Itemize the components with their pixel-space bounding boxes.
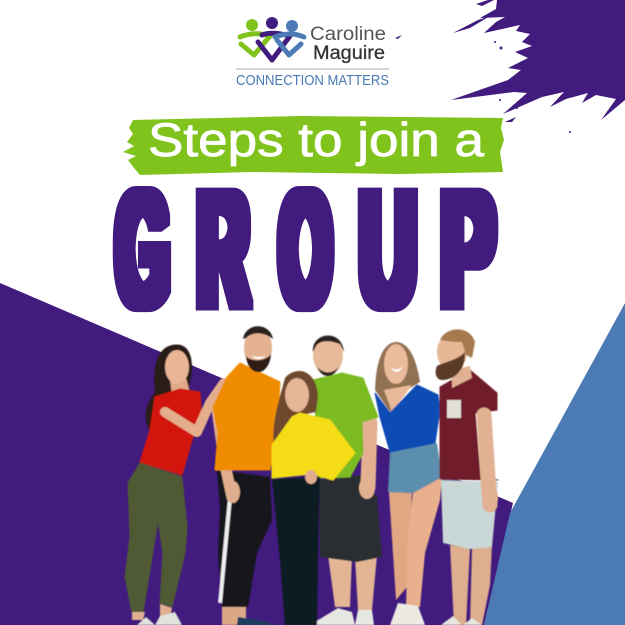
heading GROUP: O: [280, 158, 331, 341]
person: woman in yellow: [272, 371, 355, 625]
blue background shape: [484, 303, 625, 625]
people group: [125, 326, 498, 625]
person: man in maroon: [436, 329, 498, 625]
person: woman in blue: [375, 342, 442, 625]
icon: three connected people: [240, 17, 304, 60]
green brush banner: [123, 116, 504, 175]
heading GROUP: U: [360, 159, 416, 341]
purple paint splash: [395, 0, 625, 133]
logo tagline: CONNECTION MATTERS: [236, 73, 389, 89]
heading GROUP: P: [441, 158, 495, 341]
heading GROUP: [116, 157, 495, 341]
person: man in green: [310, 335, 382, 625]
heading GROUP: G: [116, 158, 169, 341]
heading GROUP: R: [198, 157, 248, 341]
banner heading: Steps to join a: [148, 113, 485, 166]
logo wordmark: Maguire: Maguire: [313, 43, 385, 64]
purple background shape: [0, 283, 513, 625]
person: man in orange: [213, 326, 280, 625]
logo wordmark: Caroline: Caroline: [310, 24, 386, 45]
logo: [236, 17, 389, 89]
person: woman in red: [125, 344, 224, 625]
